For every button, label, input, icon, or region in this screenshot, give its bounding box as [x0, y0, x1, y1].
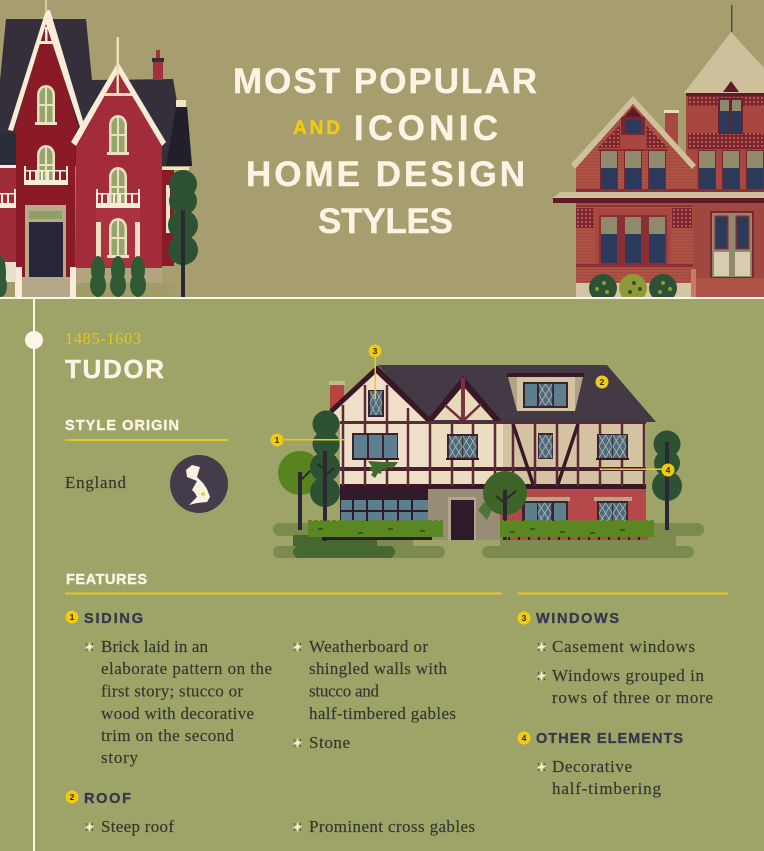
- feature: roof: [66, 790, 475, 836]
- feature: roof: 2: [70, 792, 75, 802]
- feature: siding: first story; stucco or: [101, 682, 243, 700]
- ground shadows: [273, 523, 704, 558]
- feature: other elements: [518, 731, 683, 798]
- callout 3: 3: [373, 346, 378, 356]
- feature: windows: Windows grouped in: [552, 666, 704, 685]
- title: AND: [293, 118, 340, 139]
- callout 1: 1: [275, 435, 280, 445]
- header background: [0, 0, 764, 297]
- feature: other elements: OTHER ELEMENTS: [536, 731, 683, 747]
- trees and hedges: [278, 410, 682, 541]
- illustration: red gothic house: [0, 0, 198, 297]
- feature: siding: 1: [70, 612, 75, 622]
- feature: windows: rows of three or more: [552, 688, 713, 707]
- feature: windows: 3: [522, 613, 527, 623]
- feature: roof: ROOF: [84, 791, 131, 807]
- callout 4: [600, 464, 674, 476]
- callout 1: [270, 434, 344, 446]
- feature: other elements: half-timbering: [552, 779, 662, 798]
- icon: UK map: [170, 455, 228, 513]
- feature: siding: SIDING: [84, 611, 143, 627]
- timeline: [25, 299, 43, 851]
- feature: siding: half-timbered gables: [309, 704, 456, 723]
- callout 4: 4: [666, 465, 671, 475]
- feature: siding: Weatherboard or: [309, 637, 428, 656]
- features rules: [65, 592, 728, 594]
- feature: windows: [518, 611, 713, 707]
- house body: [329, 365, 656, 540]
- callout 2: [596, 376, 608, 388]
- title: ICONIC: [354, 109, 498, 148]
- heading: features: FEATURES: [66, 572, 147, 588]
- illustration: tudor house: [270, 344, 704, 558]
- feature: other elements: 4: [522, 733, 527, 743]
- illustration: victorian house: [553, 5, 764, 302]
- feature: siding: [66, 610, 456, 767]
- feature: roof: Prominent cross gables: [309, 817, 475, 836]
- feature: siding: trim on the second: [101, 726, 234, 745]
- feature: siding: Stone: [309, 733, 350, 752]
- title: STYLES: [318, 202, 453, 241]
- heading: style origin: STYLE ORIGIN: [65, 418, 179, 434]
- feature: siding: elaborate pattern on the: [101, 659, 272, 678]
- feature: other elements: Decorative: [552, 757, 632, 776]
- title: [233, 62, 537, 241]
- feature: siding: story: [101, 748, 138, 767]
- feature: siding: Brick laid in an: [101, 637, 208, 656]
- title: HOME DESIGN: [246, 155, 525, 194]
- feature: roof: Steep roof: [101, 817, 174, 836]
- callout 3: [368, 344, 382, 399]
- feature: windows: WINDOWS: [536, 611, 619, 627]
- callout 2: 2: [600, 377, 605, 387]
- style name: TUDOR: [65, 354, 164, 384]
- feature: siding: shingled walls with: [309, 659, 448, 678]
- feature: siding: wood with decorative: [101, 704, 254, 723]
- title: MOST POPULAR: [233, 62, 537, 101]
- section background: [0, 297, 764, 851]
- date range: 1485-1603: [65, 329, 141, 348]
- feature: siding: stucco and: [309, 682, 380, 700]
- origin text: England: [65, 473, 126, 492]
- origin rule: [65, 439, 228, 441]
- feature: windows: Casement windows: [552, 637, 695, 656]
- divider line: [0, 297, 764, 299]
